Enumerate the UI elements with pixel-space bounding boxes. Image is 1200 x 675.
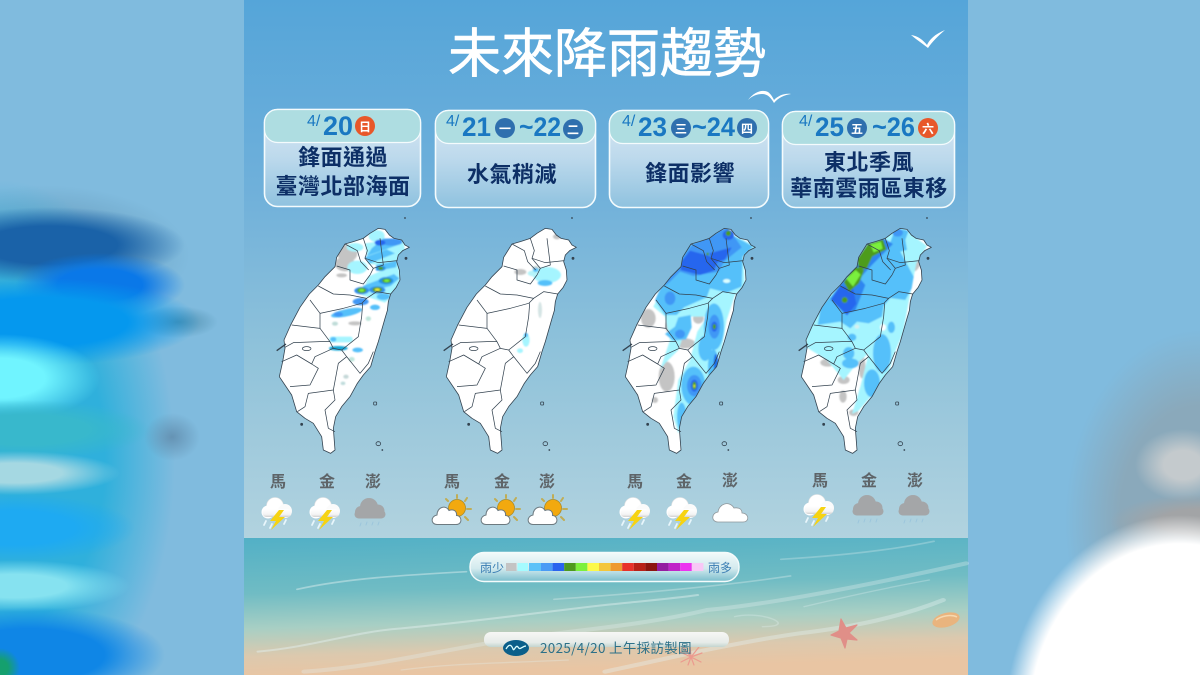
legend label: high: 雨多 [708,559,732,576]
date 4/25-26: ~26 [872,112,915,142]
outlying islands forecast: 4/20: 金 [319,468,335,492]
map: 4/25-26 rainfall [799,218,931,453]
heading text: 鋒面影響 [645,156,735,188]
credit text: 2025/4/20 上午採訪製圖 [540,637,692,657]
map: 4/23-24 rainfall [623,218,757,453]
outlying islands forecast: 4/25-26: 金 [861,467,877,491]
footer credit [484,632,729,657]
card: 4/25-26 [782,112,954,208]
date 4/23-24: 23 [638,112,667,142]
icon: coral fan [680,645,702,665]
date 4/25-26: 五 [851,120,863,137]
date 4/20 [307,111,375,141]
date 4/23-24: 四 [741,120,753,137]
outlying islands forecast: 4/23-24: 馬 [627,468,643,492]
icon: seagull near title [748,91,791,103]
rain legend [470,552,739,582]
blurred left map backdrop [0,0,244,675]
date 4/23-24: 4/ [622,113,636,130]
heading text: 水氣稍減 [467,157,557,189]
heading text [275,140,411,201]
date 4/23-24: ~24 [692,112,735,142]
outlying islands forecast: 4/21-22: 澎 [539,468,555,492]
date 4/25-26: 25 [815,112,844,142]
heading text: 東北季風 [824,145,914,177]
date 4/21-22: ~22 [519,112,561,142]
map: 4/20 rainfall [277,218,409,453]
outlying islands forecast: 4/23-24: 金 [676,468,692,492]
icon: weather agency logo [503,640,529,656]
icon: seagull upper right [911,30,945,48]
outlying islands forecast: 4/25-26: 澎 [907,467,923,491]
outlying islands forecast: 4/20: 馬 [270,468,286,492]
heading text: 臺灣北部海面 [275,169,411,201]
date 4/21-22: 21 [462,112,491,142]
beach waves [258,541,966,672]
heading text: 華南雲雨區東移 [790,171,948,203]
heading text [790,145,948,203]
outlying islands forecast: 4/21-22: 金 [494,468,510,492]
outlying islands forecast: 4/25-26 [804,467,930,527]
date 4/25-26 [799,112,938,142]
outlying islands forecast: 4/20 [262,468,386,530]
date 4/21-22 [446,112,583,142]
date 4/20: 4/ [307,113,321,130]
card: 4/23-24 [610,110,768,208]
date 4/21-22: 二 [567,121,579,138]
legend label: low: 雨少 [480,559,504,576]
icon: seashell [931,610,961,630]
outlying islands forecast: 4/20: 澎 [365,468,381,492]
title: 未來降雨趨勢 [448,12,766,88]
heading text: 鋒面通過 [298,140,388,172]
icon: starfish [831,619,857,648]
legend colour scale [506,563,703,571]
outlying islands forecast: 4/23-24 [620,467,748,530]
date 4/23-24 [622,112,757,142]
date 4/25-26: 4/ [799,113,813,130]
map: 4/21-22 rainfall [444,218,576,453]
main poster panel [244,0,968,675]
date 4/20: 20 [323,111,353,141]
outlying islands forecast: 4/21-22 [432,468,567,524]
date 4/23-24: 三 [675,120,687,137]
blurred right map backdrop [968,0,1200,675]
outlying islands forecast: 4/21-22: 馬 [444,468,460,492]
date 4/20: 日 [359,118,371,135]
date 4/25-26: 六 [922,120,934,137]
outlying islands forecast: 4/25-26: 馬 [812,467,828,491]
outlying islands forecast: 4/23-24: 澎 [722,467,738,491]
card: 4/20 [264,110,420,206]
date 4/21-22: 4/ [446,113,460,130]
date 4/21-22: 一 [499,120,511,137]
card: 4/21-22 [436,110,596,208]
